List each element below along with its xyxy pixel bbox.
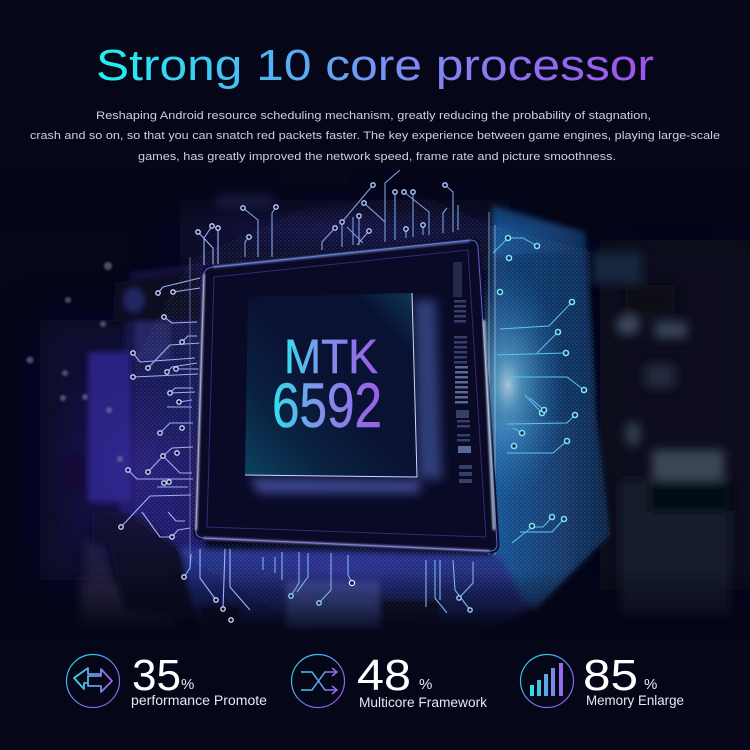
stat: 35% performance Promote xyxy=(66,651,267,708)
value: 35 xyxy=(132,651,181,700)
chip inner die recess xyxy=(217,262,461,518)
value: 85 xyxy=(583,651,638,700)
icon: shuffle arrows xyxy=(292,654,344,708)
percent sign: % xyxy=(181,676,194,693)
chip die xyxy=(245,293,417,477)
description paragraph: Reshaping Android resource scheduling mechanism, greatly reducing the probability of stagnation, xyxy=(96,110,651,122)
description paragraph xyxy=(30,110,720,163)
circuit traces: top xyxy=(241,170,458,257)
icon: signal bars xyxy=(520,654,574,708)
chip outer frame xyxy=(196,240,497,551)
chip glow halo xyxy=(250,300,442,493)
chip contact strips xyxy=(453,262,472,483)
chip label: MTK: MTK xyxy=(284,331,378,384)
circuit traces: left (purple) xyxy=(119,224,250,622)
description paragraph: crash and so on, so that you can snatch red packets faster. The key experience between game engines, playing large-scale xyxy=(30,130,720,142)
description paragraph: games, has greatly improved the network speed, frame rate and picture smoothness. xyxy=(138,151,616,163)
circuit traces: bottom xyxy=(263,552,473,613)
stat: 48% Multicore Framework xyxy=(292,651,487,710)
circuit traces: right (blue) xyxy=(489,212,586,555)
icon: exchange arrows xyxy=(66,654,120,708)
percent sign: % xyxy=(644,676,657,693)
percent sign: % xyxy=(419,676,432,693)
label: performance Promote xyxy=(131,693,267,708)
label: Multicore Framework xyxy=(359,695,487,710)
chip label: 6592: 6592 xyxy=(272,370,382,440)
value: 48 xyxy=(357,651,411,700)
decor: dots masks xyxy=(135,195,610,625)
title: Strong 10 core processor xyxy=(96,41,654,90)
processor chip xyxy=(196,240,497,551)
stat: 85% Memory Enlarge xyxy=(520,651,684,708)
label: Memory Enlarge xyxy=(586,693,684,708)
